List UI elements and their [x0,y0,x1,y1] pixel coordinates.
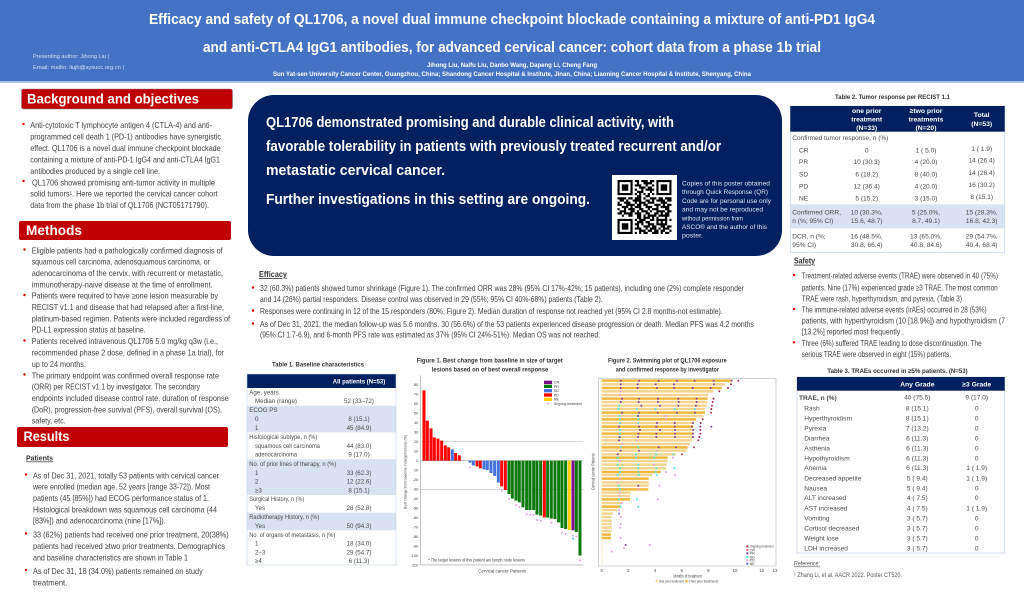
reference [794,562,902,579]
x axis label: Cervical cancer Patients [478,569,526,574]
table 3: TRAEs: 1 ( 1.9) [966,465,987,472]
table 3: TRAEs: 0 [975,495,979,502]
patients text: As of Dec 31, 2021, totally 53 patients with cervical cancer [33,471,219,480]
table 3: TRAEs: 3 ( 5.7) [907,545,928,552]
legend: SD [554,388,559,393]
table 2: tumor response: PD [799,184,808,190]
y axis tick labels: 80 [414,382,419,387]
figure 2 heading [608,358,727,374]
presenting author [33,54,124,71]
authors and affiliations: Sun Yat-sen University Cancer Center, Guangzhou, China; Shandong Cancer Hospital & Institute, Jinan, China; Liaoning Cancer Hospital & Institute, Shenyang, China [273,71,752,78]
table 3: TRAEs: 0 [975,486,979,492]
y axis tick labels: -100 [410,553,419,558]
table 3: TRAEs: Hyperthyroidism [804,416,852,423]
footnote: * The target lesions of this patient are lymph node lesions [428,558,525,563]
table 3: TRAEs [797,377,1005,553]
table 2: tumor response: 1 ( 5.0) [916,148,936,154]
table 2: tumor response: treatments [909,117,944,124]
background text: solid tumors¹. Here we reported the cervical cancer cohort [30,190,218,199]
safety subheading: Safety [794,257,815,266]
y axis tick labels: -110 [411,562,419,567]
table 3: TRAEs: ALT increased [804,495,847,502]
waterfall bars [424,390,580,556]
title: and anti-CTLA4 IgG1 antibodies, for advanced cervical cancer: cohort data from a phase 1b trial [203,40,821,56]
table 1: baseline characteristics: Yes [255,505,265,512]
methods text: Eligible patients had a pathologically confirmed diagnosis of [32,246,223,255]
table 2: tumor response: 16 (30.2) [968,182,995,189]
reference: Reference: [794,562,820,568]
methods text: platinum-based regimen. Patients were included regardless of [32,314,231,323]
table 2: tumor response: 15.6, 48.7) [851,218,882,225]
table 1: baseline characteristics: 28 (52.8) [347,505,371,512]
safety text: serious TRAE were observed in eight (15%) patients. [802,350,951,359]
y axis tick labels: 50 [414,411,419,416]
table 3: TRAEs: 0 [975,545,979,552]
table 1: baseline characteristics: 2 [255,478,259,486]
y axis tick labels: -80 [413,534,419,539]
conclusion text: favorable tolerability in patients with previously treated recurrent and/or [266,138,721,155]
y axis tick labels: -70 [413,525,419,530]
methods text: endpoints included disease control rate, duration of response [32,394,229,403]
table 1: baseline characteristics: 1 [255,425,259,432]
table 1: baseline characteristics: Histological subtype, n (%) [249,434,317,441]
y axis tick labels: 30 [414,430,419,435]
y axis tick labels: -30 [413,487,419,492]
methods text: up to 24 months. [32,360,86,369]
efficacy text: (95% CI 1.7-6.9), and 6-month PFS rate was estimated as 37% (95% CI 24%-51%). Median OS was not reached. [260,331,600,340]
table 3: TRAEs: 0 [975,525,979,532]
table 1: baseline characteristics: 52 (33–72) [344,398,374,405]
methods text: (ORR) per RECIST v1.1 by investigator. The secondary [32,383,201,392]
table 1: baseline characteristics: 9 (17.0) [348,452,370,458]
methods text: squamous cell carcinoma, adenosquamous carcinoma, or [32,258,210,267]
patients text: treatment. [33,578,67,587]
figure 2 heading: and confirmed response by investigator [616,366,719,374]
table 2: tumor response: 29 (54.7%, [966,234,998,240]
title: Efficacy and safety of QL1706, a novel dual immune checkpoint blockade containing a mixture of anti-PD1 IgG4 [149,12,875,28]
table 3: TRAEs: 0 [975,436,979,442]
figure 1 heading [417,358,563,374]
QR copyright notice: through Quick Response (QR) [682,189,768,196]
x axis ticks: 6 [680,568,683,573]
efficacy text: As of Dec 31, 2021, the median follow-up was 5.6 months. 30 (56.6%) of the 53 patients experienced disease progression or death. Median PFS was 4.2 months [260,320,754,329]
table 2: tumor response: 13 (65.0%, [910,234,942,240]
table 2: tumor response: CR [799,148,809,154]
table 1: baseline characteristics: All patients (N=53) [333,380,385,386]
table 2: tumor response: (N=53) [971,121,992,128]
table 3: TRAEs: 7 (13.2) [906,426,929,433]
table 1: baseline characteristics: No. of prior lines of therapy, n (%) [249,461,336,468]
table 3: TRAEs: 5 ( 9.4) [907,476,928,482]
methods text: The primary endpoint was confirmed overall response rate [32,371,219,380]
efficacy text: 32 (60.3%) patients showed tumor shrinkage (Figure 1). The confirmed ORR was 28% (95% CI 17%-42%; 15 patients), including one (2%) complete responder [260,284,744,293]
table 2: tumor response: 6 (18.2) [855,172,878,178]
background text: Anti-cytotoxic T lymphocyte antigen 4 (CTLA-4) and anti- [30,121,212,130]
patients text: Histological breakdown was squamous cell carcinoma (44 [33,505,217,514]
table 2 heading: Table 2. Tumor response per RECIST 1.1 [835,94,950,101]
legend: PR [554,384,559,389]
table 2: tumor response: 10 (30.3%, [851,210,883,216]
table 1: baseline characteristics: ≥3 [255,488,262,494]
y axis tick labels: -20 [413,477,419,482]
table 3: TRAEs: 1 ( 1.9) [966,476,987,482]
table 2: tumor response: 40.8, 84.6) [910,242,942,249]
table 1: baseline characteristics: 8 (15.1) [348,416,370,423]
efficacy text: and 14 (26%) partial responders. Disease control was observed in 29 (55%; 95% CI 40%-68%) patients (Table 2). [260,295,603,304]
figure 1 heading: Figure 1. Best change from baseline in size of target [417,358,563,364]
table 2: tumor response: 10 (30.3) [853,159,880,166]
methods text: safety, etc. [32,417,66,426]
table 2: tumor response: Confirmed tumor response, n (%) [792,135,888,142]
y axis label: Cervical cancer Patients [590,453,595,490]
table 1: baseline characteristics: No. of organs of metastasis, n (%) [249,532,335,539]
table 2: tumor response: 0 [865,148,869,154]
table 3: TRAEs: Anemia [804,465,827,472]
heading: methods [19,221,231,240]
QR copyright notice: without permission from [681,215,743,222]
table 3: TRAEs: 0 [975,416,979,423]
table 3: TRAEs: 3 ( 5.7) [907,516,928,523]
table 3: TRAEs: Pyrexia [804,426,827,433]
table 3: TRAEs: Weight lose [804,535,839,542]
table 1 heading: Table 1. Baseline characteristics [272,361,364,368]
table 1: baseline characteristics [247,374,396,565]
methods text: immunotherapy-naive disease at the time of enrollment. [32,280,213,289]
figure 2 heading: Figure 2. Swimming plot of QL1706 exposure [608,358,727,364]
table 3: TRAEs: Rash [804,405,820,412]
heading: methods: Methods [26,222,82,238]
bar legend [656,578,718,583]
x axis ticks: 13 [773,568,778,573]
heading: background: Background and objectives [27,90,199,106]
table 2: tumor response: 16 (48.5%, [851,234,883,240]
table 3: TRAEs: Decreased appetite [804,476,862,482]
legend: NE [554,397,560,402]
table 3: TRAEs: LDH increased [804,545,848,552]
table 2: tumor response [790,106,1005,252]
x axis label: Months of treatment [673,573,702,578]
methods text: adenocarcinoma of the cervix, with recurrent or metastatic, [32,269,223,278]
table 1: baseline characteristics: 44 (83.0) [347,443,371,450]
authors and affiliations [273,62,752,78]
conclusion text: QL1706 demonstrated promising and durable clinical activity, with [266,114,674,131]
table 1: baseline characteristics: Radiotherapy History, n (%) [249,514,319,521]
y axis tick labels: -40 [413,496,419,501]
heading: results [17,427,228,447]
table 2: tumor response: Confirmed ORR, [792,210,841,216]
table 2: tumor response: 16.8, 42.3) [966,218,997,225]
table 3: TRAEs: Nausea [804,486,827,492]
table 2: tumor response: DCR, n (%; [792,234,826,240]
QR copyright notice: Code are for personal use only [682,198,772,205]
efficacy text: Responses were continuing in 12 of the 15 responders (80%, Figure 2). Median duration of response not reached yet (95% CI 2.8 months-not estimable). [260,307,723,316]
table 3: TRAEs: Diarrhea [804,436,830,442]
y axis tick labels: 70 [414,392,419,397]
methods text: recommended phase 2 dose, defined in a phase 1a trial), for [32,348,224,357]
y axis tick labels: -10 [413,468,419,473]
table 2: tumor response: one prior [852,108,882,115]
patients text: and baseline characteristics are shown in Table 1 [33,553,188,562]
background text: effect. QL1706 is a novel dual immune checkpoint blockade [30,144,221,153]
table 2: tumor response: 8 (15.1) [970,194,993,201]
table 2: tumor response: ≥two prior [910,108,943,115]
table 2: tumor response: SD [799,172,808,178]
y axis tick labels: 10 [414,449,419,454]
table 2: tumor response: 14 (26.4) [968,158,995,165]
efficacy text [252,284,754,340]
table 3: TRAEs: 3 ( 5.7) [907,525,928,532]
table 3: TRAEs: AST increased [804,506,848,512]
table 2: tumor response: 1 ( 1.9) [971,146,992,153]
legend: Ongoing treatment [554,401,582,406]
y axis tick labels: -90 [413,544,419,549]
table 2: tumor response: (N=33) [856,125,877,132]
y axis tick labels: -60 [413,515,419,520]
table 1: baseline characteristics: Median (range) [255,398,297,405]
header banner [0,0,1024,83]
response legend: Ongoing treatment [750,545,774,549]
table 2: tumor response: n (%; 95% CI) [792,218,833,225]
table 2: tumor response: 8 (40.0) [915,172,937,178]
table 2: tumor response: (N=20) [916,125,936,132]
table 1: baseline characteristics: 2–3 [255,549,266,556]
table 3: TRAEs: 0 [975,535,979,542]
patients subheading: Patients [26,456,53,462]
y axis label: Best change from baseline in target lesions (%) [402,434,407,509]
table 3: TRAEs: Hypothyroidism [804,456,850,462]
methods text: PD-L1 expression status at baseline. [32,326,146,335]
safety text: [13.2%] reported most frequently . [802,328,904,337]
methods text: Patients received intravenous QL1706 5.0 mg/kg q3w (i.e., [32,337,218,346]
conclusion text: metastatic cervical cancer. [266,162,445,179]
table 1: baseline characteristics: 50 (94.3) [347,523,371,530]
background text: programmed cell death 1 (PD-1) antibodies have synergistic [30,133,221,142]
legend: CR [554,380,560,385]
x axis ticks: 2 [627,568,630,573]
methods text: Patients were required to have ≥one lesion measurable by [32,292,219,301]
patients text: [83%]) and adenocarcinoma (nine [17%]). [33,517,166,526]
patients text: 33 (62%) patients had received one prior treatment, 20(38%) [33,531,229,540]
table 2: tumor response: treatment [851,117,883,124]
safety text: TRAE were rash, hyperthyroidism, and pyrexia. (Table 3) [802,294,962,303]
table 3: TRAEs: 1 ( 1.9) [966,506,987,512]
table 3: TRAEs: Asthenia [804,446,830,452]
table 3: TRAEs: 40 (75.5) [904,395,931,402]
table 2: tumor response: 95% CI) [792,242,816,249]
x axis ticks: 8 [707,568,710,573]
table 2: tumor response: 40.4, 68.4) [966,242,997,249]
title [149,12,875,56]
table 2: tumor response: 12 (36.4) [853,184,880,190]
table 3: TRAEs: 0 [975,446,979,452]
safety text [793,272,1005,359]
heading: results: Results [24,428,70,444]
background text: QL1706 showed promising anti-tumor activity in multiple [32,178,215,187]
table 1: baseline characteristics: squamous cell carcinoma [255,443,321,450]
QR copyright notice: Copies of this poster obtained [682,180,771,188]
table 1: baseline characteristics: 0 [255,416,259,423]
table 2: tumor response: 3 (15.0) [915,196,937,202]
table 3: TRAEs: 0 [975,405,979,412]
table 3: TRAEs: 8 (15.1) [906,405,929,412]
table 3: TRAEs: 4 ( 7.5) [907,495,928,502]
table 1: baseline characteristics: 1 [255,540,259,548]
icon: QR code [612,175,677,240]
QR copyright notice: poster. [682,232,703,239]
patients text: As of Dec 31, 18 (34.0%) patients remained on study [33,567,203,576]
conclusion text [266,114,721,208]
y axis tick labels: 20 [414,439,419,444]
table 3: TRAEs: 5 ( 9.4) [907,486,928,492]
authors and affiliations: Jihong Liu, Naifu Liu, Danbo Wang, Dapeng Li, Cheng Fang [427,62,597,69]
table 2: tumor response: 5 (25.0%, [912,210,940,216]
x axis ticks: 10 [733,568,738,573]
methods text [23,246,231,426]
table 1: baseline characteristics: Yes [255,523,265,530]
legend [544,380,582,406]
panel: methods [19,221,231,426]
background text: containing a mixture of anti-PD-1 IgG4 and anti-CTLA4 IgG1 [30,156,220,165]
panel: background and objectives [22,89,232,210]
table 1: baseline characteristics: 12 (22.6) [347,478,371,486]
table 1: baseline characteristics: adenocarcinoma [255,452,298,458]
QR copyright notice: and may not be reproduced [682,207,764,214]
table 3: TRAEs: 4 ( 7.5) [907,506,928,512]
table 2: tumor response: 5 (15.2) [855,196,878,202]
background text: data from the phase 1b trial of QL1706 (NCT05171790). [30,201,209,210]
y axis tick labels: 60 [414,401,419,406]
response markers [612,381,738,552]
efficacy subheading: Efficacy [259,270,287,279]
table 1: baseline characteristics: 18 (34.0) [347,540,371,548]
background text: antibodies produced by a single cell line. [30,167,160,176]
table 1: baseline characteristics: 1 [255,470,259,477]
legend: PD [554,392,559,397]
table 3: TRAEs: 6 (11.3) [906,446,928,452]
table 2: tumor response: NE [799,196,809,202]
table 2: tumor response: 15 (28.3%, [966,210,998,216]
table 2: tumor response: PR [799,159,808,166]
table 3 heading: Table 3. TRAEs occurred in ≥5% patients. (N=53) [827,368,968,375]
x axis ticks: 4 [654,568,657,573]
panel: results [17,427,229,587]
table 3: TRAEs: 3 ( 5.7) [907,535,928,542]
response legend [746,545,774,566]
table 3: TRAEs: 8 (15.1) [906,416,929,423]
presenting author: Email: mailto: liujh@sysucc.org.cn | [33,65,124,71]
table 3: TRAEs: Any Grade [900,382,935,388]
patients text [25,471,229,587]
table 3: TRAEs: 0 [975,426,979,433]
response legend: SD [750,555,755,559]
table 1: baseline characteristics: ≥4 [255,558,262,565]
patients text: were enrolled (median age, 52 years [range 33-72]). Most [32,483,211,492]
response legend: PR [750,552,755,556]
table 1: baseline characteristics: Age, years [249,390,279,396]
methods text: RECIST v1.1 and disease that had relapsed after a first-line, [32,303,224,312]
bar legend: ≥Two prior treatments [689,578,718,583]
table 2: tumor response: Total [974,112,990,119]
table 3: TRAEs: 6 (11.3) [906,456,928,462]
panel: efficacy [252,270,754,340]
presenting author: Presenting author: Jihong Liu | [33,54,109,60]
QR copyright notice: ASCO® and the author of this [682,223,767,231]
y axis tick labels [410,382,419,567]
table 2: tumor response: 8.7, 49.1) [912,218,940,225]
heading: background [22,89,232,109]
y axis tick labels: -50 [413,506,419,511]
ongoing treatment markers [470,467,580,560]
background text [22,121,221,210]
x axis ticks: 12 [759,568,765,573]
methods text: (DoR), progression-free survival (PFS), overall survival (OS), [32,405,222,414]
panel: key conclusion [248,95,782,256]
figure 2: swimming plot [590,378,778,583]
table 1: baseline characteristics: ECOG PS [249,407,278,414]
table 2: tumor response: 4 (20.0) [915,159,937,166]
table 1: baseline characteristics: 8 (15.1) [348,488,370,494]
table 3: TRAEs: 9 (17.0) [965,395,988,402]
table 1: baseline characteristics: Surgical History, n (%) [249,496,304,503]
conclusion text: Further investigations in this setting are ongoing. [266,191,590,208]
patients text: patients (45 [85%]) had ECOG performance status of 1. [33,494,209,503]
table 1: baseline characteristics: 6 (11.3) [349,558,369,565]
table 1: baseline characteristics: 45 (84.9) [347,425,371,432]
y axis tick labels: 0 [416,458,419,463]
table 2: tumor response: 4 (20.0) [915,184,937,190]
response legend: PD [750,559,755,563]
table 3: TRAEs: 6 (11.3) [906,436,928,442]
table 1: baseline characteristics: 33 (62.3) [347,470,371,477]
figure 1 heading: lesions based on of best overall response [432,366,548,374]
reference: ¹ Zhang Li, et al. AACR 2022. Poster CT520. [794,573,902,579]
table 3: TRAEs: 0 [975,516,979,523]
y axis tick labels: 40 [414,420,419,425]
x axis ticks: 0 [600,568,603,573]
table 2: tumor response: 30.8, 66.4) [851,242,882,249]
panel: safety [793,257,1005,359]
table 3: TRAEs: TRAE, n (%) [799,395,837,402]
response legend: CR [750,548,755,552]
table 3: TRAEs: Vomiting [804,516,830,523]
QR copyright notice [681,180,772,239]
swim bars [602,381,732,562]
table 2: tumor response: 14 (26.4) [968,170,995,177]
table 3: TRAEs: 0 [975,456,979,462]
x axis ticks [600,568,778,573]
figure 1: waterfall chart [402,375,583,574]
patients text: patients had received ≥two prior treatments. Demographics [33,542,225,551]
bar legend: One prior treatment [659,578,684,583]
response legend: NE [750,562,755,566]
table 1: baseline characteristics: 29 (54.7) [347,549,371,556]
table 3: TRAEs: Cortisol decreased [804,525,860,532]
table 3: TRAEs: ≥3 Grade [962,382,991,388]
table 3: TRAEs: 6 (11.3) [906,465,928,472]
